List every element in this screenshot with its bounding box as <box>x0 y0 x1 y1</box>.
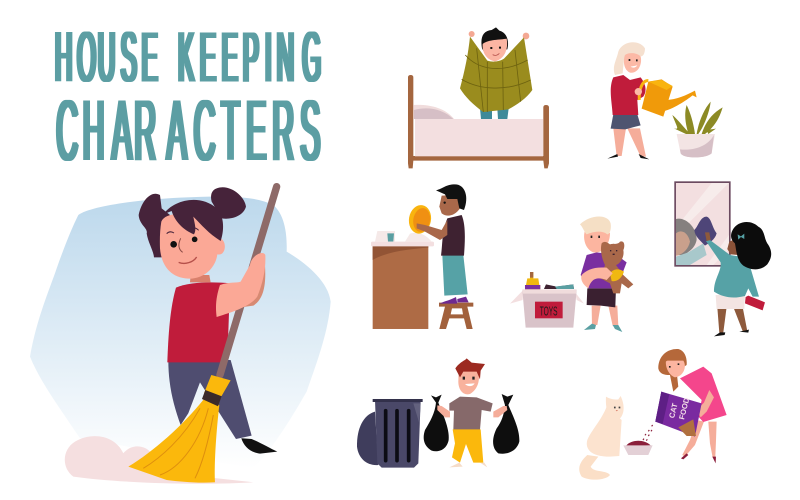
bag side shade <box>655 392 669 424</box>
stool <box>439 303 473 329</box>
counter top <box>371 242 434 246</box>
plate <box>407 203 433 235</box>
broom bristle cap <box>204 375 231 398</box>
hair back <box>658 349 687 392</box>
mirror glass <box>676 183 729 265</box>
face <box>666 361 685 377</box>
hand <box>635 88 642 95</box>
box of toys <box>510 272 584 328</box>
reflection face <box>676 231 690 256</box>
shirt <box>441 215 465 256</box>
arms <box>437 405 507 417</box>
can lid <box>648 80 673 90</box>
head <box>584 227 610 253</box>
bin lid <box>357 412 378 465</box>
right bag <box>493 394 519 454</box>
pot <box>677 134 715 157</box>
reflection hair <box>676 219 697 255</box>
bowl food <box>626 441 651 446</box>
clothes in the box <box>544 284 574 289</box>
hair <box>731 222 771 269</box>
boy eyes and mouth <box>490 47 501 49</box>
face <box>624 53 641 73</box>
pants <box>442 255 468 296</box>
label <box>535 302 563 318</box>
shoes <box>714 330 749 336</box>
arm <box>417 220 447 240</box>
girl pouring cat food: FOOD <box>677 396 691 420</box>
bin highlight <box>413 403 421 423</box>
label text: TOYS <box>540 305 558 319</box>
girl pouring cat food <box>643 349 727 463</box>
shirt <box>581 252 627 288</box>
sweater <box>611 75 646 115</box>
stacking toy <box>525 272 540 289</box>
boy hugging teddy bear <box>580 216 633 332</box>
shorts <box>587 288 616 307</box>
girl watering a plant <box>607 42 723 159</box>
mirror frame <box>674 181 731 267</box>
boy legs <box>480 108 509 119</box>
bag text: CAT <box>667 402 680 419</box>
arm <box>697 390 714 417</box>
eyes <box>591 236 600 238</box>
broom band <box>202 390 222 406</box>
box flaps <box>510 290 584 304</box>
dish rack <box>375 231 432 242</box>
cat food bag <box>655 392 702 437</box>
hair back <box>614 42 645 75</box>
legs <box>682 420 717 457</box>
box rim <box>522 289 577 294</box>
head <box>439 195 460 216</box>
cat head <box>606 396 624 420</box>
feet <box>449 463 487 467</box>
arm <box>216 253 265 317</box>
broomstick <box>220 187 277 375</box>
cabinet <box>373 246 428 329</box>
hair bow <box>738 234 744 240</box>
bag cat <box>678 419 696 436</box>
title <box>55 19 321 179</box>
face <box>160 214 225 279</box>
bear <box>601 241 633 293</box>
cabinet shade <box>373 246 428 260</box>
bear face <box>610 250 617 255</box>
mirror highlight <box>680 183 729 265</box>
shoes <box>439 297 469 304</box>
shoe <box>241 438 277 454</box>
shirt <box>167 282 230 362</box>
face <box>727 238 738 255</box>
boy face <box>483 39 507 61</box>
arm <box>581 267 613 288</box>
tail <box>579 455 610 480</box>
eye <box>443 201 446 204</box>
hair <box>436 184 466 210</box>
cat body <box>587 407 622 457</box>
hair buns and back <box>139 194 170 257</box>
falling kibble <box>643 425 653 441</box>
box <box>522 290 577 328</box>
bottle <box>745 296 765 310</box>
bear tummy <box>610 269 624 281</box>
spout <box>662 91 697 112</box>
hand <box>705 232 711 241</box>
cloth <box>694 217 717 246</box>
eyes <box>669 363 679 368</box>
hair <box>580 216 611 234</box>
shoes <box>681 453 716 463</box>
watering can handle <box>639 81 648 100</box>
legs <box>717 307 747 333</box>
legs <box>613 128 646 157</box>
shoes <box>607 154 649 159</box>
mattress <box>415 119 543 156</box>
reflection arm <box>676 243 707 265</box>
pants <box>452 429 483 463</box>
bed frame <box>408 75 549 168</box>
shirt <box>449 397 493 430</box>
boy hair <box>481 27 508 51</box>
face features <box>167 228 199 263</box>
arm shadow <box>233 265 265 308</box>
plant leaves <box>672 102 723 134</box>
boy taking out trash <box>357 358 519 468</box>
boy hands <box>469 31 475 37</box>
hair <box>455 358 485 379</box>
shorts <box>716 295 745 309</box>
legs <box>592 306 618 326</box>
bin <box>375 400 421 468</box>
dress <box>680 367 727 422</box>
bed with boy shaking a blanket <box>408 27 549 168</box>
blanket <box>460 37 532 112</box>
cat sitting by a bowl <box>579 396 653 480</box>
girl cleaning a mirror <box>674 181 771 336</box>
skirt <box>611 114 641 129</box>
boy washing a plate at a counter <box>371 184 473 329</box>
dust cloud <box>65 436 253 484</box>
main illustration: girl sweeping with broom <box>30 187 331 484</box>
hair fringe <box>663 350 685 364</box>
bin rim <box>373 399 423 402</box>
bowl <box>623 445 653 455</box>
title: HOUSE KEEPING <box>55 19 321 98</box>
sweater <box>706 240 759 298</box>
bin slots <box>386 411 409 461</box>
eyes and smile <box>629 59 638 61</box>
pants <box>168 360 252 439</box>
neck <box>190 275 211 282</box>
left bag <box>424 395 449 451</box>
hair top <box>163 200 223 241</box>
background blob <box>30 196 331 468</box>
broom bristle lines <box>143 408 213 478</box>
eyes and smile <box>463 377 475 380</box>
cup <box>387 233 394 242</box>
shoes <box>584 324 622 332</box>
broom head <box>128 399 219 483</box>
title: CHARACTERS <box>56 81 320 179</box>
pillow <box>413 105 454 119</box>
cat face <box>614 407 620 408</box>
head <box>458 368 479 394</box>
blanket lines <box>462 48 531 112</box>
watering can <box>642 79 673 117</box>
